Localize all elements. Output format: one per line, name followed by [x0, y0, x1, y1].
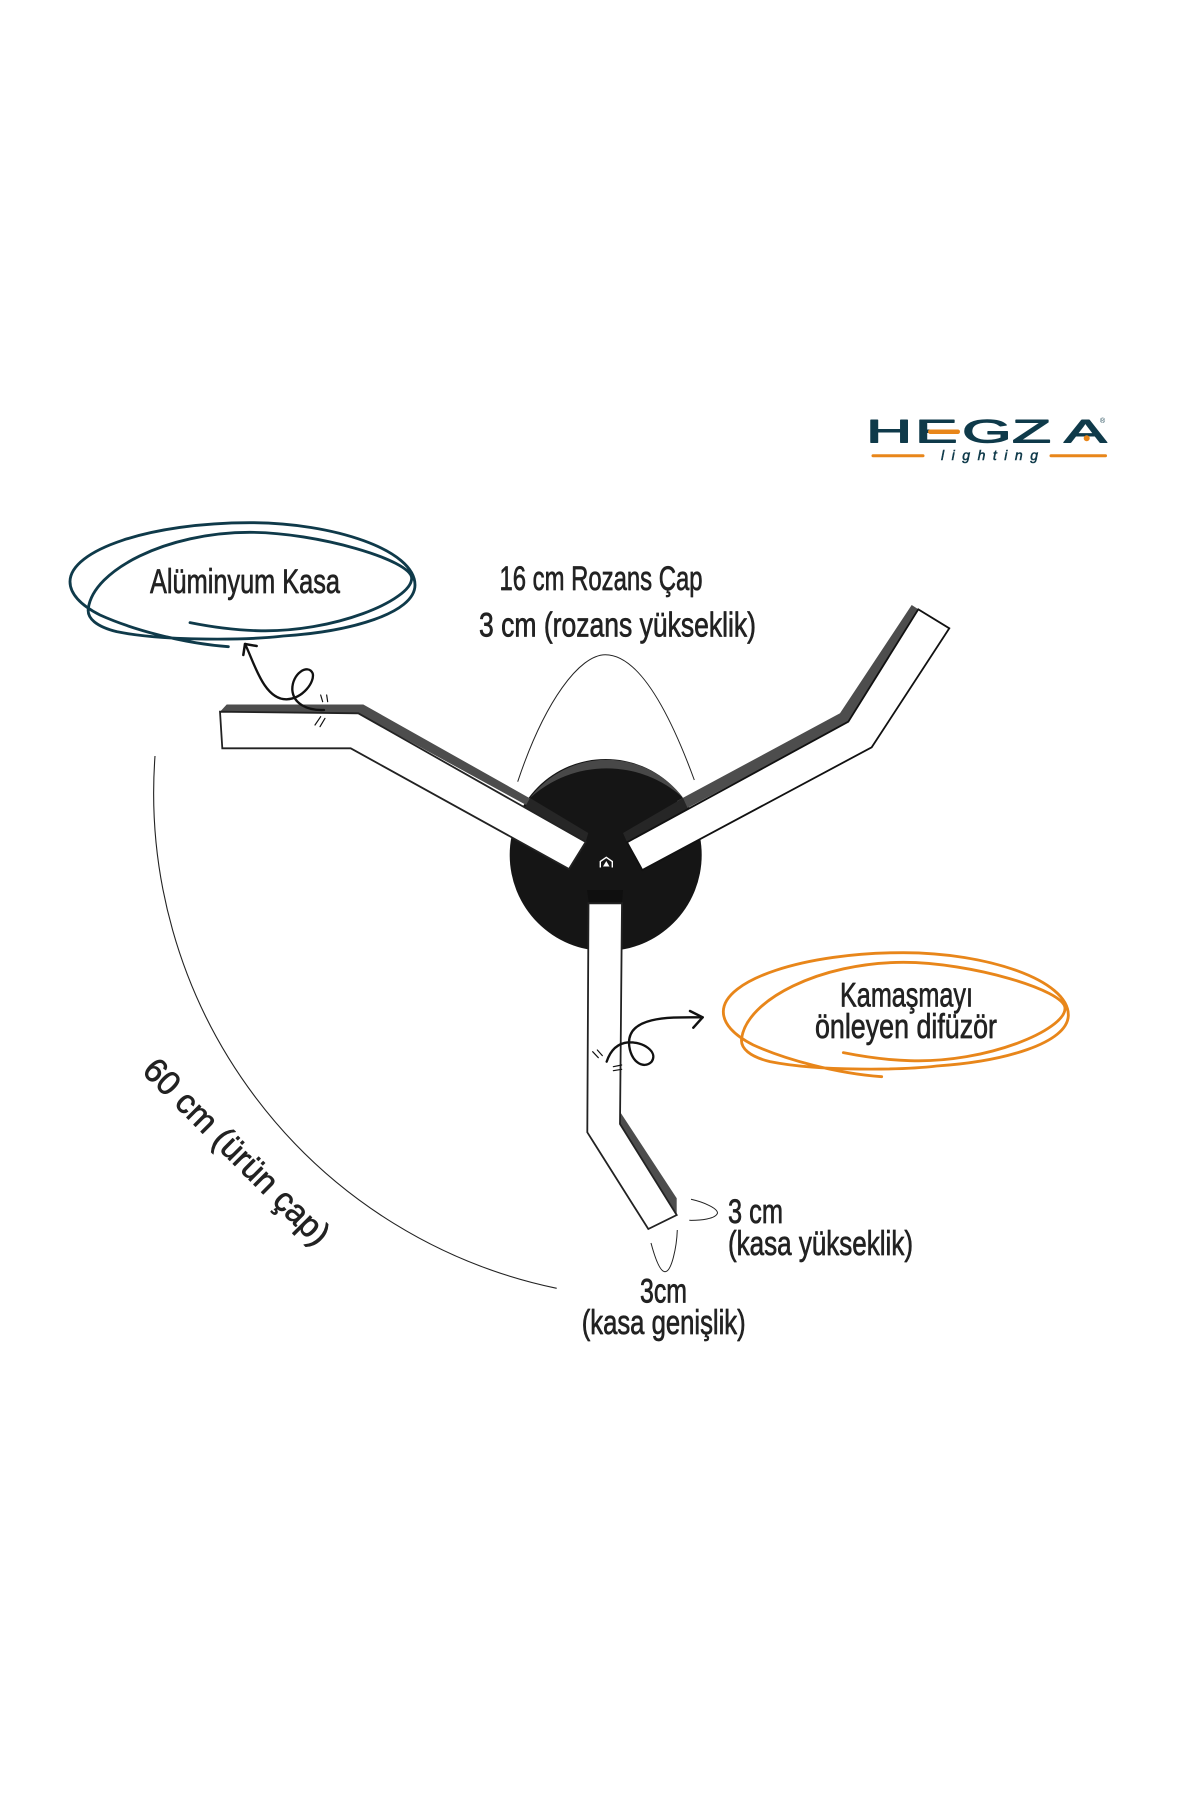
dimension: product diameter	[135, 756, 557, 1288]
label: 3cm kasa genişlik: (kasa genişlik)	[582, 1304, 746, 1342]
callout: aluminium frame	[70, 523, 415, 727]
height bracket	[689, 1199, 718, 1220]
label: diffuser: önleyen difüzör	[815, 1008, 997, 1046]
curly arrow to frame	[243, 644, 328, 727]
label: Alüminyum Kasa: Alüminyum Kasa	[150, 563, 340, 601]
label: 3 cm kasa yükseklik: 3 cm	[728, 1193, 783, 1231]
label: diffuser: Kamaşmayı	[840, 977, 973, 1015]
rosette arc	[518, 655, 694, 782]
label: 3cm kasa genişlik: 3cm	[640, 1273, 687, 1311]
logo: Hegza lighting: HEGZA	[866, 413, 1107, 449]
logo: Hegza lighting: ®	[1100, 417, 1106, 425]
dimension: frame height	[689, 1193, 913, 1263]
curly arrow to diffuser	[593, 1011, 703, 1071]
logo: Hegza lighting: lighting	[941, 447, 1038, 463]
rosette center emblem	[600, 857, 612, 868]
label: diffuser	[815, 977, 997, 1046]
bottom arm	[587, 890, 677, 1229]
width bracket	[651, 1230, 677, 1272]
label: 3 cm kasa yükseklik	[728, 1193, 913, 1263]
dimension: frame width	[582, 1230, 746, 1342]
rosette labels: 16 cm Rozans Çap	[500, 560, 702, 598]
product: three-arm ceiling lamp	[220, 605, 949, 1229]
label: 3cm kasa genişlik	[582, 1273, 746, 1342]
dimension: rosette	[479, 560, 756, 782]
right arm	[623, 605, 949, 870]
left arm	[220, 704, 588, 869]
diameter arc	[154, 756, 557, 1288]
round ceiling rosette	[510, 759, 702, 951]
label: 60 cm: 60 cm (ürün çap)	[135, 1051, 338, 1253]
label: 3 cm kasa yükseklik: (kasa yükseklik)	[728, 1225, 913, 1263]
rosette labels: 3 cm (rozans yükseklik)	[479, 607, 756, 645]
callout: anti-glare diffuser	[593, 953, 1068, 1077]
teal hand-drawn ellipse	[70, 523, 415, 647]
rosette labels	[479, 560, 756, 645]
orange hand-drawn ellipse	[723, 953, 1068, 1077]
